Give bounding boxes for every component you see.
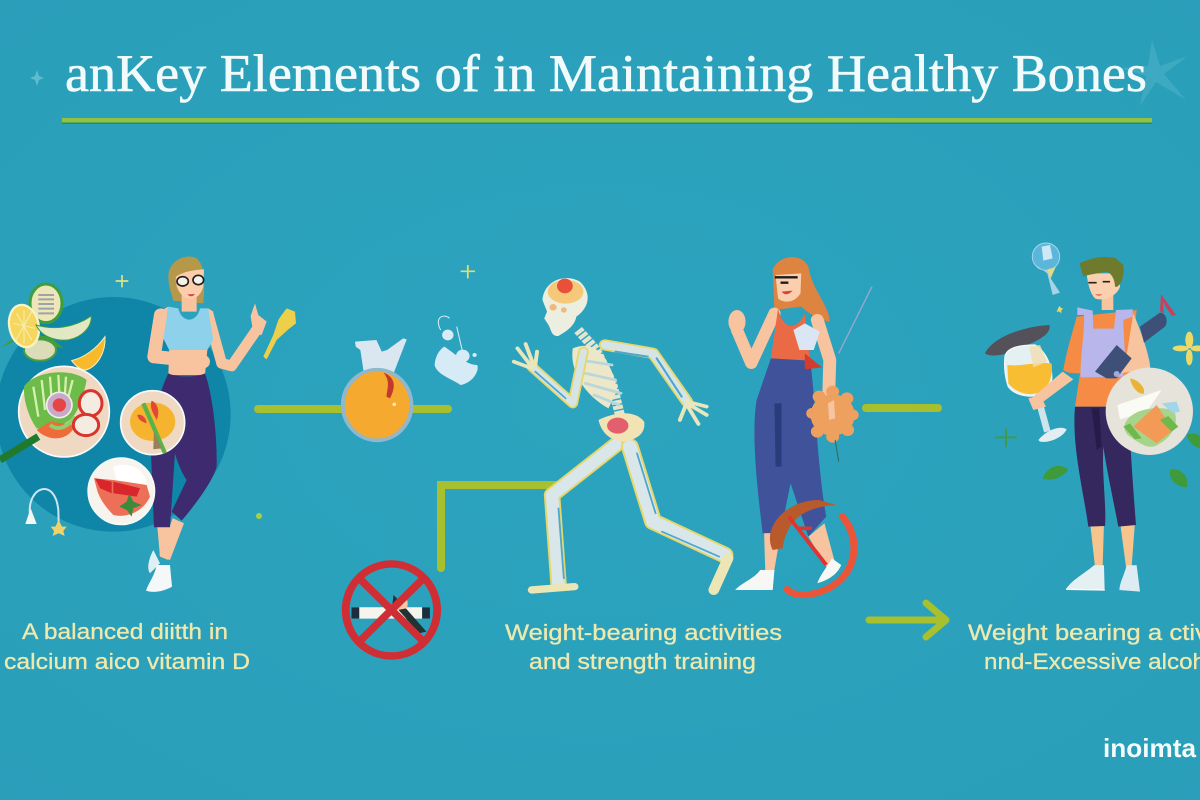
icon: water drop glass [1032,243,1060,295]
sparkle [1057,306,1063,313]
plate: salad [0,366,109,460]
title underline [62,118,1152,124]
skull [542,278,588,336]
figure: woman with short hair [1028,257,1150,567]
shoes [735,570,774,590]
icon: wine glass [985,325,1067,442]
panel: lifestyle [985,243,1200,592]
orange pompom [806,386,859,443]
plate: soup [121,391,185,455]
arrow [869,603,946,637]
caption: weight-bearing: Weight-bearing activities [505,620,782,645]
spine and ribs [578,330,620,415]
panel: diet [0,256,296,592]
icon: yellow flower [1173,332,1200,365]
decorative sparkle: title right [1120,40,1188,106]
caption: alcohol: Weight bearing a ctiv [968,620,1200,645]
caption: weight-bearing: and strength training [529,649,756,674]
caption: alcohol: nnd-Excessive alcoh [984,649,1200,674]
back arm [605,345,687,402]
plate: meat [88,458,155,525]
title: anKey Elements of in Maintaining Healthy Bones [65,45,1147,103]
background circle [0,297,231,532]
shoes [1066,565,1140,592]
connector: green lines [258,408,938,568]
icon: green leaves [1043,434,1200,487]
icon: plus [461,265,475,278]
thigh and shin: front [552,445,616,583]
icon: plate of salad [1106,368,1193,455]
icon: orange flask [343,338,411,440]
dot [256,513,262,519]
caption: balanced diet [4,619,250,674]
caption: balanced diet: calcium aico vitamin D [4,649,250,674]
sparkle: title left [30,70,44,86]
feet [532,587,575,590]
icon: green plus [995,428,1017,447]
icon: lemon wedge [72,337,105,370]
icon: bag with strap [1095,294,1176,382]
thigh and shin: back [630,447,724,557]
icon: yellow star burst [263,308,296,359]
icon: citrus and melon [0,284,91,361]
hands [514,344,707,424]
figure: woman with ponytail [728,257,872,590]
stick [839,287,872,353]
front arm [532,352,583,403]
caption: balanced diet: A balanced diitth in [22,619,228,644]
icon: necklace and star [25,489,67,536]
icon: plus [116,275,128,287]
caption: alcohol [968,620,1200,674]
panel: activity [343,257,872,656]
figure: running skeleton [514,278,728,590]
pelvis [598,413,644,442]
hand bag accessory [793,323,820,350]
caption: weight-bearing [505,620,782,674]
logo text: inoimta [1103,733,1197,763]
icon: bubbles [435,316,478,385]
figure: woman with glasses [146,256,267,592]
icon: no smoking [346,564,437,656]
icon: red circular sign [770,500,854,595]
